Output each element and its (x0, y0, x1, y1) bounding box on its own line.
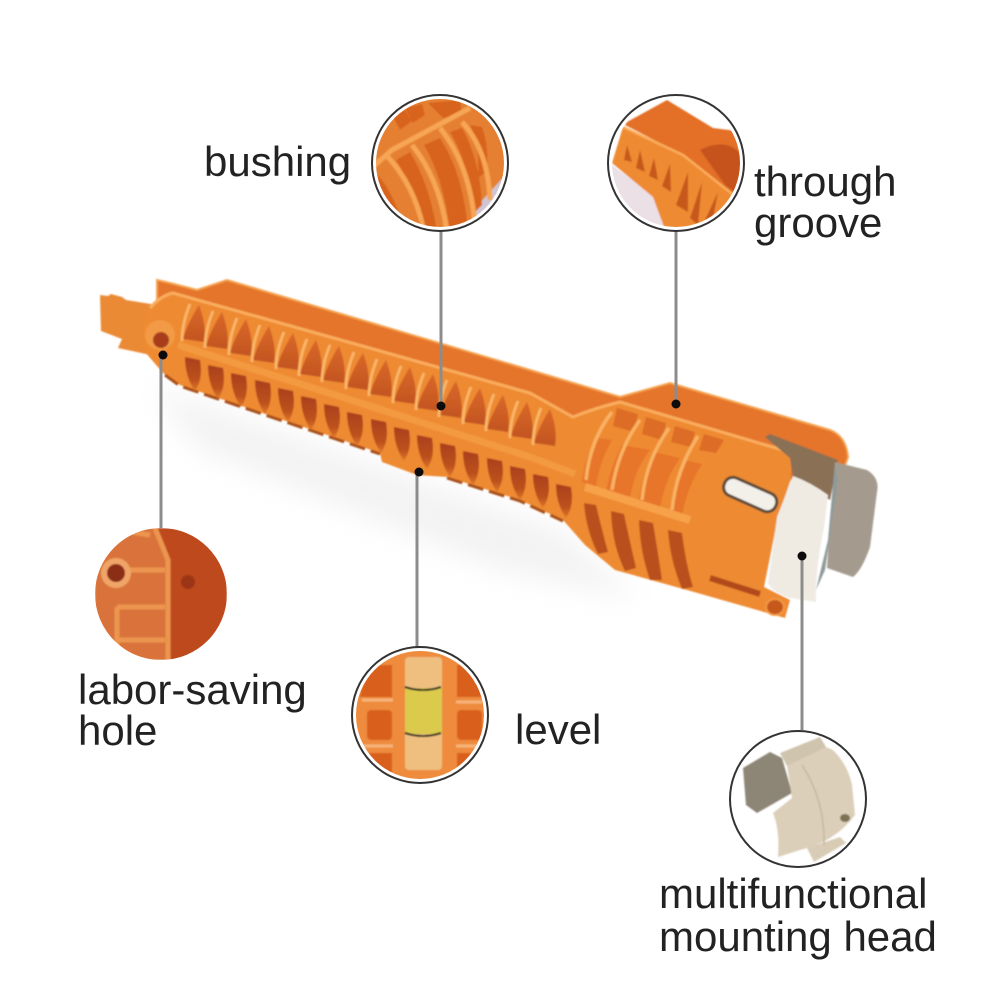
handle and head body (142, 293, 793, 618)
tool shadow (150, 385, 640, 600)
head lower pockets (584, 503, 693, 589)
head panels (582, 438, 702, 516)
label: multifunctional mounting head: multifunctional (659, 870, 927, 917)
lower rib pockets (185, 357, 572, 518)
label: bushing: bushing (204, 138, 351, 185)
circle: bushing detail (370, 94, 510, 234)
small side hole (181, 575, 195, 589)
circle: labor-saving hole detail (95, 528, 227, 660)
central longitudinal rib (178, 345, 575, 474)
lower edge scallop shading (165, 375, 563, 521)
large hole (101, 558, 131, 588)
back wall of the through groove (157, 280, 848, 480)
main tool: orange faucet wrench (100, 280, 878, 618)
circle: level detail (352, 647, 488, 783)
labor-saving hole on tool (145, 320, 175, 350)
label: through groove: groove (754, 199, 882, 246)
label: multifunctional mounting head: mounting head (659, 913, 937, 960)
head longitudinal rib (585, 487, 690, 520)
small hole (840, 814, 850, 822)
grey tab (743, 752, 792, 813)
circle: mounting head detail (730, 731, 866, 867)
top edge highlight (150, 293, 793, 453)
lower slit and tube (710, 578, 784, 615)
bottom tab (807, 837, 846, 862)
white slot pill (721, 474, 780, 515)
ribs (114, 528, 172, 660)
label: level: level (515, 706, 601, 753)
leader lines (161, 228, 802, 730)
leader dots (158, 350, 806, 560)
head top windows (613, 408, 724, 453)
label: labor-saving hole: labor-saving (78, 666, 307, 713)
white cap (768, 476, 828, 602)
level vial (405, 657, 442, 770)
right dark side (157, 528, 227, 660)
upper light piece (780, 737, 826, 766)
label: labor-saving hole: hole (78, 707, 157, 754)
grey plate edge (816, 462, 838, 590)
brown inner plate (765, 434, 838, 500)
left tip (100, 294, 157, 356)
circle: through groove detail (600, 95, 745, 235)
head ribs (586, 412, 698, 510)
upper rib pockets (182, 304, 556, 446)
label: through groove: through (754, 158, 896, 205)
beige body (773, 747, 855, 857)
grey metal plate (827, 462, 878, 577)
